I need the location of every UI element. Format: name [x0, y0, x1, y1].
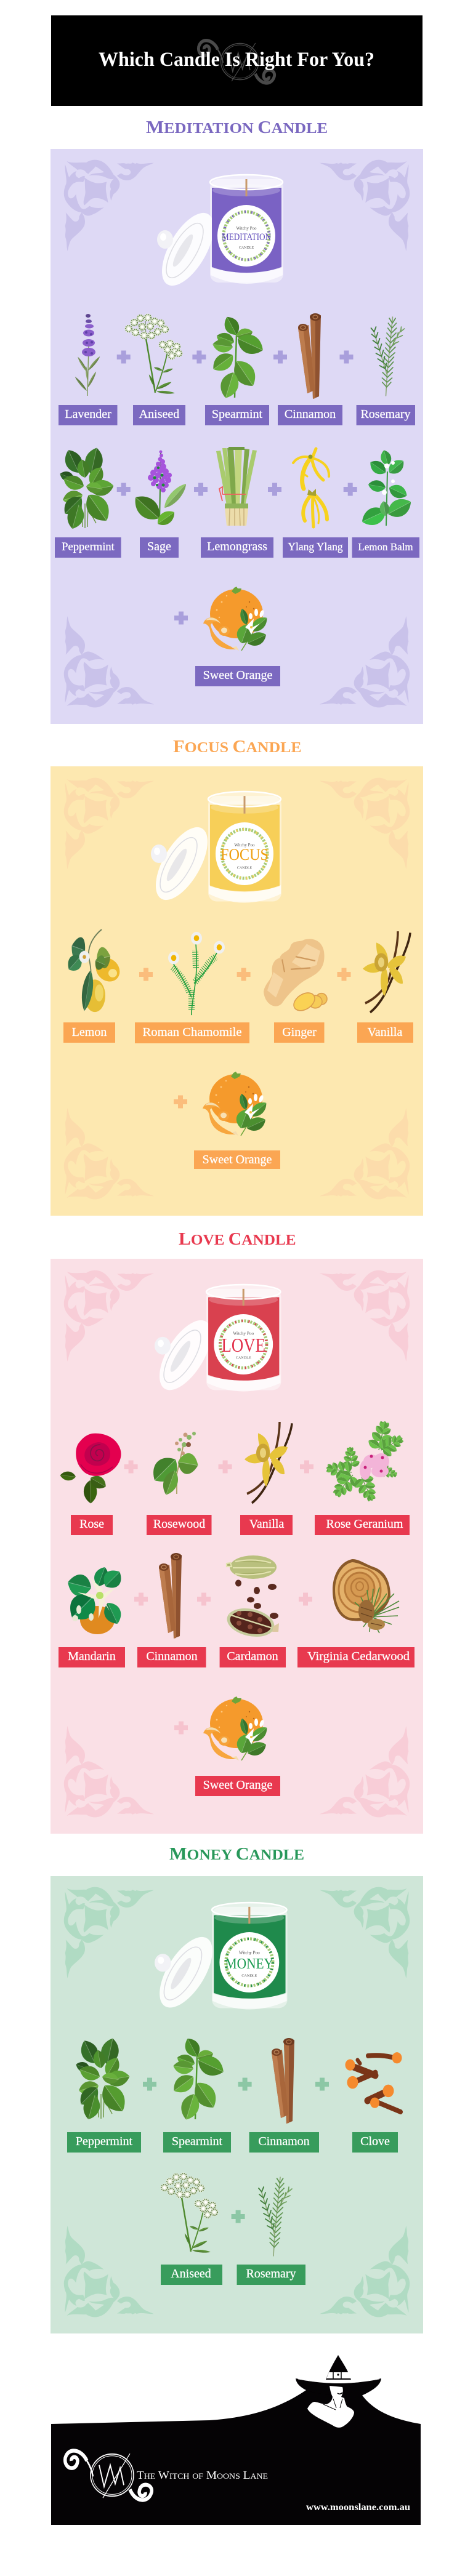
label: Lemon Balm	[352, 537, 419, 558]
candle jar: CANDLE	[236, 1357, 251, 1360]
label: Virginia Cedarwood	[297, 1647, 414, 1667]
label: Rosemary	[237, 2265, 305, 2285]
label: Lavender	[59, 405, 117, 425]
ornament: bottom right	[320, 1726, 410, 1817]
label: Sweet Orange: Sweet Orange	[203, 1153, 272, 1166]
label: Rose Geranium	[315, 1515, 410, 1535]
label: Rosewood	[147, 1515, 212, 1535]
label: Vanilla	[240, 1515, 293, 1535]
label: Rosemary	[357, 405, 415, 425]
ornament: top right	[320, 1270, 410, 1362]
label: Rosewood: Rosewood	[153, 1517, 205, 1531]
label: Spearmint	[163, 2132, 231, 2153]
icon: rose geranium	[324, 1418, 408, 1506]
icon: sage	[129, 451, 190, 529]
website: www.moonslane.com.au	[306, 2502, 410, 2513]
icon: mandarin	[63, 1565, 126, 1634]
label: Ylang Ylang: Ylang Ylang	[288, 540, 343, 553]
label: Vanilla: Vanilla	[368, 1025, 402, 1039]
icon: lemon balm	[358, 449, 414, 529]
label: Cinnamon	[278, 405, 342, 425]
label: Lemon Balm: Lemon Balm	[358, 541, 413, 553]
label: Spearmint: Spearmint	[172, 2135, 223, 2148]
candle jar: Witchy Poo	[239, 1950, 260, 1955]
label: Rose: Rose	[79, 1517, 104, 1531]
icon: rosemary	[371, 317, 404, 396]
icon: vanilla	[245, 1422, 292, 1503]
candle jar: LOVE	[222, 1334, 265, 1356]
plus	[192, 351, 206, 363]
plus	[194, 483, 208, 496]
panel: Focus Candle	[51, 766, 423, 1216]
plus	[197, 1593, 211, 1605]
footer banner	[51, 2355, 421, 2525]
candle jar	[208, 792, 281, 903]
panel: Money Candle	[51, 1876, 423, 2333]
label: Sage: Sage	[147, 540, 171, 553]
ornament: top right	[320, 778, 410, 869]
plus	[340, 351, 354, 363]
label: Lemon	[63, 1022, 115, 1043]
label: Sweet Orange	[195, 666, 280, 686]
label: Lemongrass	[201, 537, 273, 558]
icon: cinnamon	[159, 1553, 182, 1639]
label: Rose Geranium: Rose Geranium	[326, 1517, 403, 1531]
label: Cardamon: Cardamon	[227, 1650, 278, 1663]
label: Sweet Orange	[195, 1776, 280, 1796]
label: Roman Chamomile	[135, 1022, 249, 1043]
candle jar: MEDITATION	[222, 232, 271, 243]
label: Peppermint: Peppermint	[76, 2135, 133, 2148]
ornament: bottom left	[64, 1726, 154, 1817]
icon: rose	[60, 1434, 121, 1504]
label: Sweet Orange: Sweet Orange	[203, 1778, 272, 1792]
label: Cinnamon: Cinnamon	[285, 407, 336, 421]
label: Sweet Orange: Sweet Orange	[203, 668, 272, 682]
label: Sweet Orange	[194, 1150, 280, 1169]
ornament: top right	[320, 160, 410, 251]
icon: sweet orange	[203, 587, 270, 651]
plus	[219, 1460, 232, 1474]
label: Cinnamon: Cinnamon	[146, 1650, 198, 1663]
candle jar: CANDLE	[239, 246, 254, 250]
icon: clove	[345, 2052, 402, 2112]
icon: virginia cedarwood	[333, 1559, 399, 1633]
candle jar: Witchy Poo	[237, 226, 257, 231]
icon: witch silhouette	[296, 2355, 381, 2428]
icon: lavender	[74, 314, 101, 396]
label: Cinnamon	[137, 1647, 206, 1667]
plus	[134, 1593, 148, 1605]
icon: spearmint	[169, 2036, 227, 2122]
plus	[238, 2078, 252, 2090]
ornament: bottom left	[64, 616, 154, 707]
label: Cinnamon	[249, 2132, 319, 2153]
ornament: top left	[64, 1887, 154, 1978]
icon: rosemary	[259, 2177, 292, 2256]
icon: logo	[65, 2450, 152, 2500]
label: Vanilla: Vanilla	[249, 1517, 284, 1531]
candle jar: CANDLE	[241, 1975, 257, 1978]
icon: aniseed	[160, 2173, 218, 2253]
ornament: bottom right	[320, 616, 410, 707]
icon: vanilla	[363, 931, 410, 1013]
heading: Money Candle: MONEY CANDLE	[169, 1844, 304, 1864]
label: Vanilla	[357, 1022, 413, 1043]
plus	[344, 483, 357, 496]
plus	[299, 1593, 312, 1605]
icon: lemongrass	[216, 447, 257, 526]
label: Rose	[71, 1515, 113, 1535]
plus	[273, 351, 287, 363]
candle lid	[152, 205, 224, 294]
plus	[338, 968, 351, 981]
icon: cinnamon	[272, 2038, 294, 2124]
ornament: top left	[64, 778, 154, 869]
icon: sweet orange	[203, 1696, 270, 1760]
label: Clove: Clove	[360, 2135, 390, 2148]
panel: Love Candle	[51, 1259, 423, 1834]
plus	[139, 968, 153, 981]
label: Ginger: Ginger	[282, 1025, 317, 1039]
icon: aniseed	[124, 314, 182, 395]
label: Peppermint	[55, 537, 121, 558]
icon: peppermint	[75, 2037, 131, 2122]
candle jar: MONEY	[225, 1956, 273, 1972]
plus	[124, 1460, 138, 1474]
ornament: top left	[64, 1270, 154, 1362]
label: Mandarin: Mandarin	[68, 1650, 116, 1663]
ornament: bottom left	[64, 1108, 154, 1199]
ornament: bottom right	[320, 2226, 410, 2317]
plus	[268, 483, 281, 496]
candle jar: FOCUS	[220, 846, 269, 864]
label: Aniseed	[133, 405, 185, 425]
label: Ylang Ylang	[283, 537, 348, 558]
label: Lemongrass: Lemongrass	[207, 540, 267, 553]
heading: Love Candle: LOVE CANDLE	[179, 1229, 296, 1249]
label: Ginger	[274, 1022, 324, 1043]
icon: ylang ylang	[293, 449, 329, 527]
label: Roman Chamomile: Roman Chamomile	[143, 1025, 242, 1039]
label: Lemon: Lemon	[72, 1025, 107, 1039]
heading: Meditation Candle: MEDITATION CANDLE	[146, 118, 328, 137]
ornament: bottom left	[64, 2226, 154, 2317]
icon: spearmint	[209, 314, 267, 401]
candle jar	[212, 1903, 288, 2009]
candle jar: Witchy Poo	[233, 1331, 254, 1336]
label: Aniseed: Aniseed	[139, 407, 179, 421]
label: Clove	[352, 2132, 398, 2153]
ornament: top right	[320, 1887, 410, 1978]
label: Mandarin	[59, 1647, 125, 1667]
plus	[174, 612, 188, 624]
plus	[315, 2078, 329, 2090]
candle lid	[149, 1312, 222, 1398]
label: Spearmint	[205, 405, 269, 425]
candle jar	[206, 1285, 281, 1391]
icon: faded logo	[198, 41, 275, 83]
icon: lemon	[64, 929, 123, 1012]
icon: peppermint	[59, 446, 115, 531]
candle jar: Witchy Poo	[235, 843, 255, 848]
brand name: The Witch of Moons Lane	[137, 2469, 268, 2481]
plus	[174, 1096, 187, 1108]
icon: rosewood	[147, 1432, 200, 1497]
label: Cardamon	[220, 1647, 286, 1667]
label: Rosemary: Rosemary	[246, 2267, 296, 2281]
candle jar: CANDLE	[237, 866, 252, 870]
icon: roman chamomile	[168, 932, 225, 1015]
label: Aniseed	[161, 2265, 222, 2285]
candle lid	[145, 819, 218, 908]
label: Lavender: Lavender	[65, 407, 111, 421]
heading: Focus Candle: FOCUS CANDLE	[173, 737, 302, 756]
icon: cinnamon	[298, 313, 321, 399]
label: Peppermint	[67, 2132, 141, 2153]
plus	[143, 2078, 156, 2090]
label: Rosemary: Rosemary	[360, 407, 411, 421]
icon: cardamon	[224, 1555, 279, 1641]
ornament: bottom right	[320, 1108, 410, 1199]
label: Cinnamon: Cinnamon	[258, 2135, 310, 2148]
icon: ginger	[264, 939, 327, 1014]
label: Aniseed: Aniseed	[171, 2267, 211, 2281]
plus	[232, 2210, 245, 2223]
candle lid	[149, 1929, 223, 2015]
label: Sage	[140, 537, 179, 558]
title banner	[51, 15, 423, 106]
title: Which Candle Is Right For You?	[99, 49, 374, 71]
icon: sweet orange	[203, 1072, 270, 1136]
candle jar	[210, 175, 283, 284]
plus	[117, 483, 131, 496]
label: Virginia Cedarwood: Virginia Cedarwood	[307, 1650, 410, 1663]
panel: Meditation Candle	[51, 149, 423, 724]
plus	[237, 968, 251, 981]
label: Spearmint: Spearmint	[212, 407, 263, 421]
plus	[117, 351, 131, 363]
plus	[174, 1721, 188, 1735]
ornament: top left	[64, 160, 154, 251]
label: Peppermint: Peppermint	[62, 540, 115, 553]
plus	[300, 1460, 313, 1474]
